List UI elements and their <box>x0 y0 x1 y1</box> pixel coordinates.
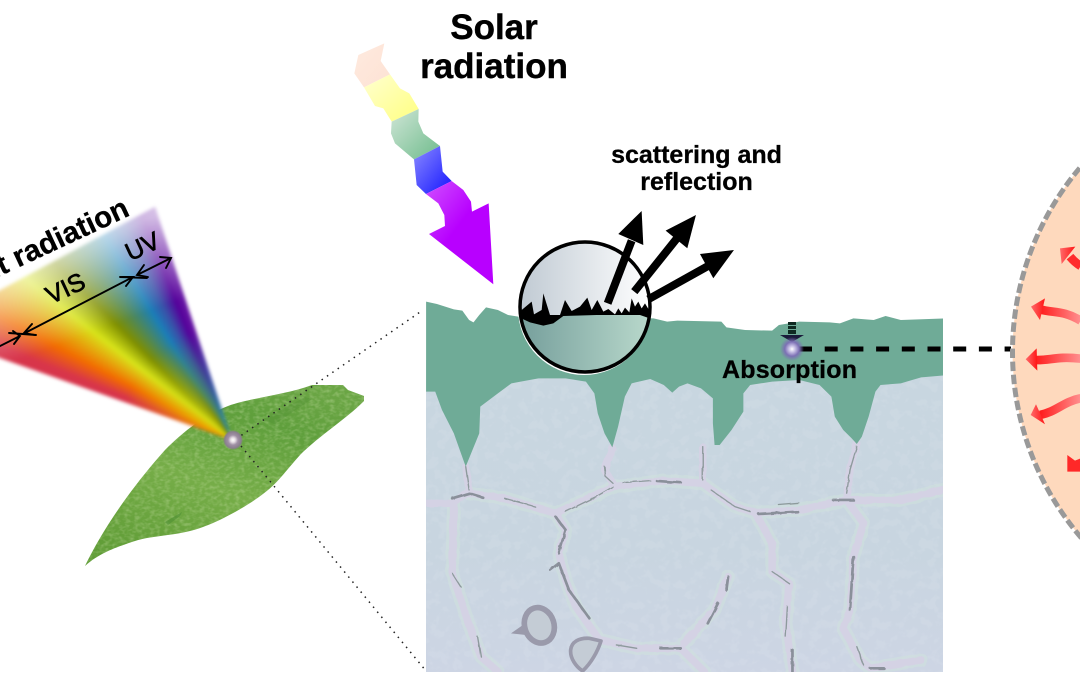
scattering and reflection label: scattering and <box>611 141 782 169</box>
arrow: solar radiation beam <box>354 43 493 284</box>
UV label: UV <box>121 227 165 267</box>
panel: leaf cross-section tissue <box>426 302 948 672</box>
panel: heat zoom circle <box>1012 66 1080 638</box>
icon: light spot on leaf <box>223 430 243 450</box>
cell texture <box>426 360 943 672</box>
solar radiation title: Solar <box>450 8 538 47</box>
spectrum arrows <box>0 257 171 346</box>
heat arrow 1 <box>1060 247 1080 266</box>
heat arrow 5 <box>1067 455 1080 472</box>
icon: absorption down arrow <box>780 322 804 342</box>
red heat arrows <box>1026 247 1080 472</box>
scattering and reflection label: reflection <box>640 168 753 196</box>
ring tail <box>511 626 524 635</box>
rainbow light fan <box>0 206 231 440</box>
cell walls <box>426 443 948 672</box>
reflected arrows <box>608 211 734 303</box>
small ring <box>571 638 601 671</box>
absorption label: Absorption <box>722 356 857 384</box>
cell layer <box>426 360 943 672</box>
epidermis layer <box>426 302 948 467</box>
icon: absorption glow <box>780 337 804 361</box>
large ring <box>522 604 558 646</box>
solar radiation title: radiation <box>420 47 568 86</box>
solar radiation title <box>420 8 568 86</box>
plant cell rings <box>511 604 601 671</box>
magnifier circle <box>517 240 652 375</box>
dashed link to zoom circle <box>799 346 1011 352</box>
VIS label: VIS <box>41 268 90 310</box>
heat arrow 2 <box>1031 298 1080 321</box>
scattering and reflection label <box>611 141 782 196</box>
heat arrow 4 <box>1031 398 1080 424</box>
heat arrow 3 <box>1026 348 1080 371</box>
dotted zoom lines <box>236 310 426 671</box>
rough leaf surface <box>517 293 652 326</box>
